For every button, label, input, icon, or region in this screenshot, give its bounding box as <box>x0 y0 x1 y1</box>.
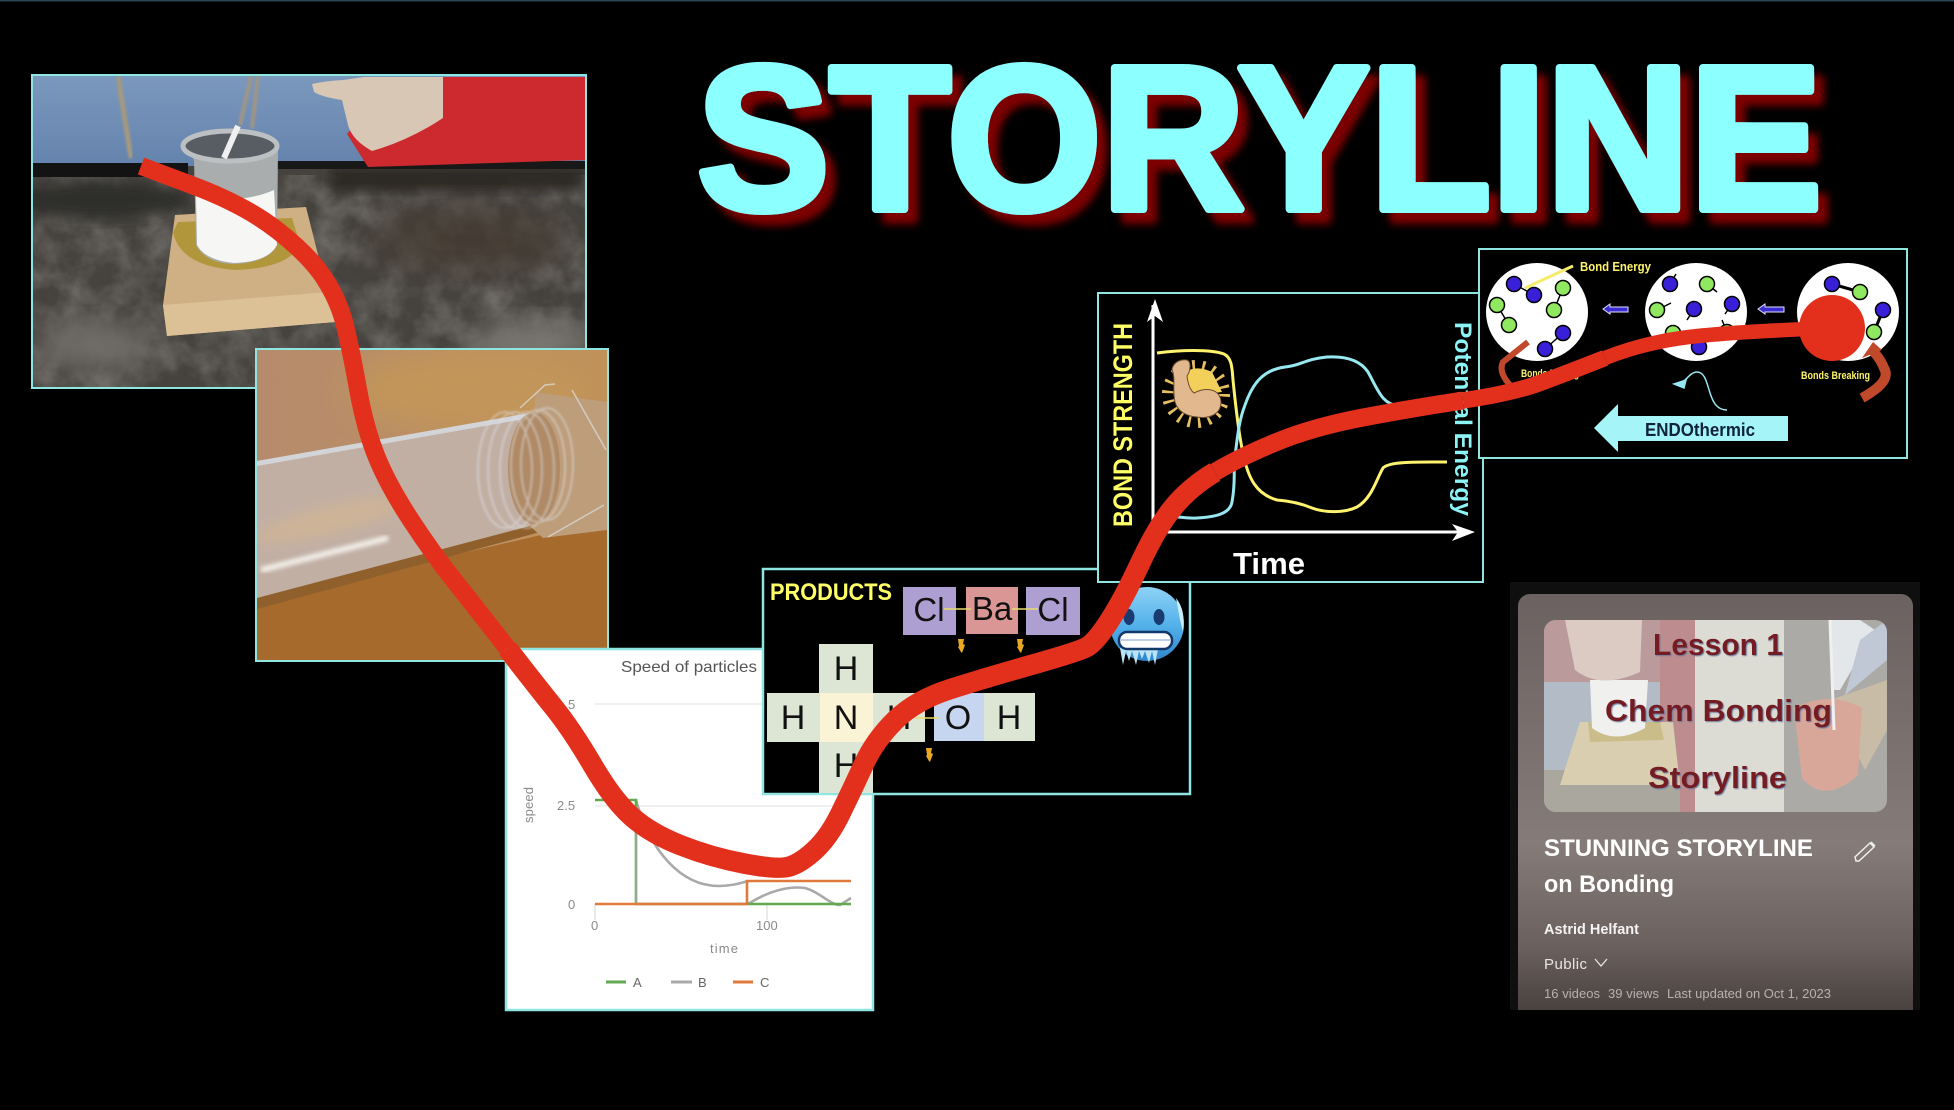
ammonium hydroxide boxes: H <box>834 747 858 785</box>
panel: bond strength graph <box>1098 293 1483 582</box>
playlist owner: Astrid Helfant <box>1544 922 1639 938</box>
particle circle: bonds making <box>1486 263 1588 361</box>
chart title: Speed of particles <box>621 659 757 676</box>
thumbnail text: Storyline <box>1648 760 1787 795</box>
barium chloride boxes: Cl <box>913 591 945 628</box>
photo: beaker on wooden block <box>10 75 590 388</box>
ammonium hydroxide boxes: N <box>834 699 858 737</box>
barium chloride boxes: Ba <box>972 590 1013 627</box>
playlist title: on Bonding <box>1544 871 1674 898</box>
ammonium hydroxide boxes: H <box>997 699 1021 737</box>
barium chloride boxes <box>903 587 1080 635</box>
curve: bond strength <box>1157 350 1447 512</box>
panel: products <box>763 569 1190 794</box>
playlist stats <box>1544 986 1831 1001</box>
thumbnail text <box>1605 627 1832 795</box>
arrow: bonds making brown <box>1502 342 1528 385</box>
axis labels: speed <box>521 787 536 823</box>
legend: C <box>760 975 769 990</box>
title: STORYLINE <box>697 24 1822 253</box>
privacy label: Public <box>1544 956 1588 973</box>
playlist title: STUNNING STORYLINE <box>1544 835 1813 862</box>
label: bond energy: Bond Energy <box>1580 259 1652 274</box>
legend: B <box>698 975 707 990</box>
ammonium hydroxide boxes: H <box>834 650 858 688</box>
axis labels: 0 <box>568 897 575 912</box>
icons: small sparks <box>926 639 1024 762</box>
axis labels: 100 <box>756 918 778 933</box>
label: bonds making: Bonds Making <box>1521 368 1579 380</box>
legend <box>606 975 769 990</box>
arrows: small purple <box>1603 304 1784 314</box>
particle circle: middle <box>1645 263 1747 361</box>
label: potential energy: Potential Energy <box>1449 322 1476 516</box>
panel: playlist card <box>1510 582 1920 1010</box>
panel: endothermic particle diagram <box>1479 249 1907 458</box>
arrow: endothermic: ENDOthermic <box>1645 419 1755 440</box>
ammonium hydroxide boxes <box>767 644 1035 793</box>
photo: plastic tube on wood <box>254 349 608 661</box>
ammonium hydroxide boxes: H <box>781 699 805 737</box>
axis labels: 0 <box>591 918 598 933</box>
arrow: bonds breaking brown <box>1862 342 1886 398</box>
barium chloride boxes: Cl <box>1037 591 1069 628</box>
icon: flexed muscle with sunburst <box>1169 360 1223 421</box>
axis labels: 2.5 <box>557 798 575 813</box>
curve: potential energy <box>1157 357 1445 518</box>
arrow: endothermic <box>1594 404 1788 452</box>
panel: speed of particles chart <box>506 649 873 1010</box>
privacy label <box>1544 956 1607 973</box>
icon: freezing face <box>1110 587 1184 665</box>
playlist stats: 39 views <box>1608 986 1660 1001</box>
playlist title <box>1544 835 1813 898</box>
series: A B C <box>595 800 851 905</box>
ammonium hydroxide boxes: H <box>887 699 911 737</box>
particle circle: bonds breaking <box>1797 263 1899 361</box>
playlist stats: Last updated on Oct 1, 2023 <box>1667 986 1831 1001</box>
playlist thumbnail <box>1544 620 1887 812</box>
axes <box>1147 299 1475 541</box>
axis labels: time <box>710 941 738 956</box>
axis labels <box>521 697 778 956</box>
label: bond strength: BOND STRENGTH <box>1108 323 1138 527</box>
ammonium hydroxide boxes: O <box>945 699 971 737</box>
label: bonds breaking: Bonds Breaking <box>1801 370 1870 382</box>
playlist stats: 16 videos <box>1544 986 1600 1001</box>
label: time: Time <box>1233 546 1305 581</box>
label: bond energy <box>1525 259 1652 288</box>
arrow: thin energy curve <box>1674 372 1727 410</box>
icon: pencil <box>1855 842 1875 861</box>
thumbnail text: Chem Bonding <box>1605 693 1832 728</box>
legend: A <box>633 975 642 990</box>
heading: products: PRODUCTS <box>770 579 892 606</box>
storyline red path <box>141 166 1865 868</box>
axis labels: 5 <box>568 697 575 712</box>
thumbnail text: Lesson 1 <box>1653 627 1783 662</box>
